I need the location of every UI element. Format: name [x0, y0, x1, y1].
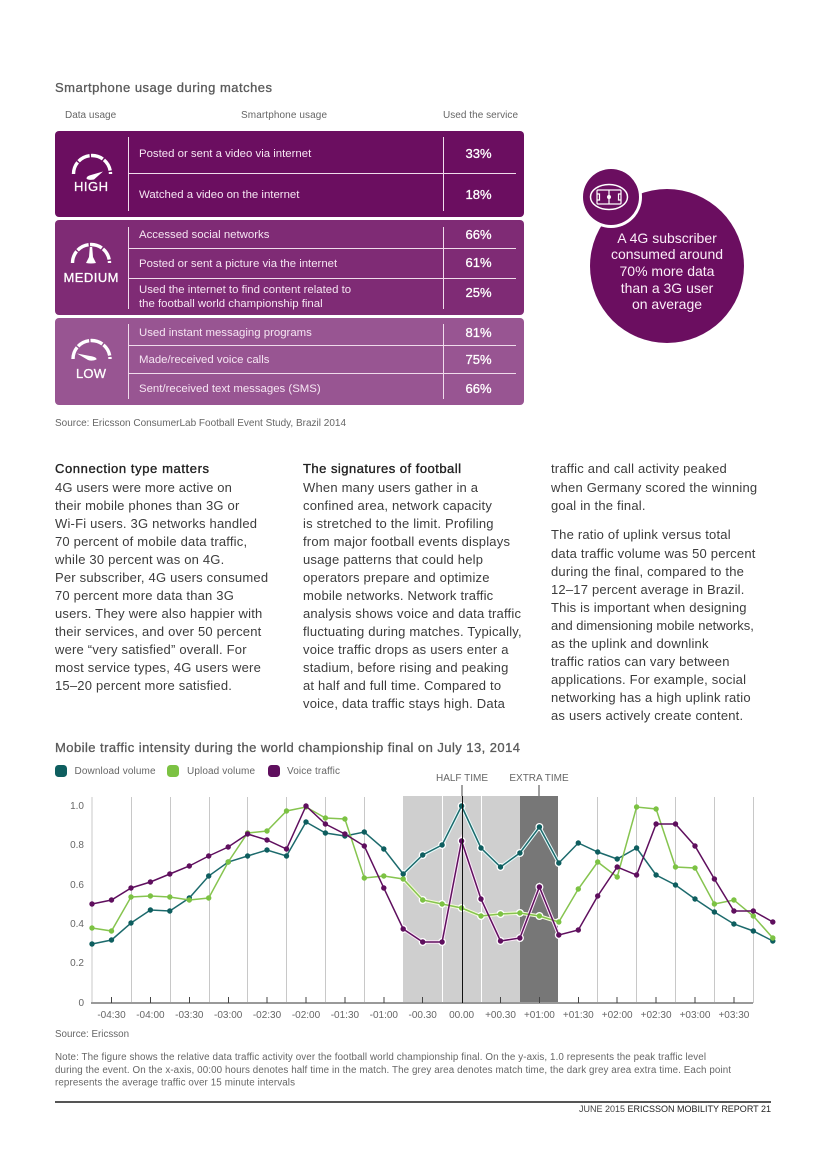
panel: low data usage: Used instant messaging programs	[139, 327, 312, 339]
annotations: half time and extra time: EXTRA TIME	[509, 773, 569, 784]
text column: continuation: data traffic volume was 50 percent	[551, 546, 756, 561]
chart note: represents the average traffic over 15 minute intervals	[55, 1078, 295, 1088]
table column headers: Used the service	[443, 110, 518, 121]
x-axis labels	[97, 1010, 750, 1021]
y-axis labels: 0.6	[70, 880, 84, 891]
halos inside match time	[403, 802, 559, 946]
callout: 4G subscriber: than a 3G user	[621, 280, 714, 296]
table column headers	[65, 110, 518, 121]
panel: medium data usage: 25%	[465, 285, 492, 300]
panel: medium data usage: 61%	[465, 255, 492, 270]
line chart: traffic intensity	[70, 773, 773, 1021]
callout: 4G subscriber: on average	[632, 296, 702, 312]
x-axis labels: +03:00	[680, 1010, 711, 1021]
text column: the signatures of football: The signatures of football	[303, 461, 461, 476]
text column: connection type matters: Wi-Fi users. 3G networks handled	[55, 516, 257, 531]
text column: the signatures of football: operators prepare and optimize	[303, 570, 490, 585]
text column: connection type matters: their services, and over 50 percent	[55, 624, 262, 639]
panel: medium data usage: Posted or sent a picture via the internet	[139, 258, 338, 270]
text column: continuation: when Germany scored the winning	[550, 480, 757, 495]
text column: connection type matters: 15–20 percent more satisfied.	[55, 678, 232, 693]
text column: connection type matters: while 30 percent was on 4G.	[54, 552, 224, 567]
x-axis labels: -02:00	[292, 1010, 321, 1021]
annotations: half time and extra time	[436, 773, 569, 784]
text column: continuation: networking has a high uplink ratio	[551, 690, 751, 705]
text column: the signatures of football: voice traffic drops as users enter a	[303, 642, 509, 657]
text column: connection type matters: Per subscriber, 4G users consumed	[55, 570, 268, 585]
table column headers: Smartphone usage	[241, 110, 327, 121]
icon: gauge high	[74, 156, 110, 180]
text column: continuation: as the uplink and downlink	[551, 636, 709, 651]
text column: continuation: applications. For example, social	[551, 672, 746, 687]
text column: the signatures of football: stadium, before rising and peaking	[303, 660, 509, 675]
series: upload volume	[92, 807, 773, 938]
annotations: half time and extra time: HALF TIME	[436, 773, 488, 784]
x-axis labels: -04:30	[97, 1010, 126, 1021]
text column: continuation: and dimensioning mobile networks,	[551, 618, 754, 633]
panel: high data usage	[55, 131, 524, 217]
icon: gauge medium	[72, 244, 110, 264]
callout: 4G subscriber	[580, 166, 744, 343]
panel: low data usage: Sent/received text messages (SMS)	[139, 383, 321, 395]
series: download volume	[92, 806, 773, 944]
text column: the signatures of football: mobile networks. Network traffic	[303, 588, 494, 603]
panel: low data usage: 81%	[465, 325, 492, 340]
text column: continuation: goal in the final.	[551, 498, 646, 513]
text column: continuation: traffic ratios can vary between	[551, 654, 730, 669]
chart legend: Voice traffic	[287, 766, 340, 777]
y-axis labels: 0.2	[70, 958, 84, 969]
panel: medium data usage: MEDIUM	[64, 270, 118, 285]
text column: connection type matters: most service types, 4G users were	[55, 660, 261, 675]
text column: the signatures of football: at half and full time. Compared to	[303, 678, 501, 693]
x-axis labels: 00.00	[449, 1010, 475, 1021]
heading: smartphone usage: Smartphone usage during matches	[55, 80, 272, 95]
x-axis labels: -03:30	[175, 1010, 204, 1021]
text column: connection type matters: 70 percent of mobile data traffic,	[55, 534, 247, 549]
chart note: during the event. On the x-axis, 00:00 hours denotes half time in the match. The grey area denotes match time, the dark grey area extra time. Each point	[55, 1065, 731, 1076]
text column: the signatures of football: voice, data traffic stays high. Data	[303, 696, 506, 711]
x-axis labels: +02:00	[602, 1010, 633, 1021]
y-axis labels	[70, 801, 84, 1009]
text column: the signatures of football: from major football events displays	[303, 534, 510, 549]
callout: 4G subscriber: 70% more data	[620, 263, 715, 279]
panel: low data usage: Made/received voice calls	[139, 354, 270, 366]
text column: the signatures of football: fluctuating during matches. Typically,	[303, 624, 522, 639]
footer: JUNE 2015 ERICSSON MOBILITY REPORT 21	[579, 1104, 771, 1114]
panel: medium data usage: Used the internet to find content related to	[139, 284, 351, 296]
panel: medium data usage: the football world championship final	[139, 298, 323, 310]
y-axis labels: 0	[78, 998, 84, 1009]
callout: 4G subscriber: A 4G subscriber	[617, 230, 717, 246]
icon: gauge low	[73, 340, 110, 361]
panel: low data usage: 75%	[465, 352, 492, 367]
x-axis labels: +00.30	[485, 1010, 516, 1021]
panel: high data usage: Watched a video on the internet	[139, 189, 300, 201]
panel: high data usage: HIGH	[74, 179, 108, 194]
text column: continuation: traffic and call activity peaked	[551, 461, 727, 476]
x-axis labels: -01:00	[370, 1010, 398, 1021]
chart legend: Download volume	[74, 766, 156, 777]
panel: high data usage: 18%	[465, 187, 492, 202]
series: voice traffic	[92, 806, 773, 942]
text column: connection type matters: 4G users were more active on	[55, 480, 232, 495]
panel: medium data usage: 66%	[465, 227, 492, 242]
x-axis labels: -04:00	[136, 1010, 165, 1021]
table source: Source: Ericsson ConsumerLab Football Event Study, Brazil 2014	[55, 418, 346, 429]
x-axis labels: -01:30	[331, 1010, 360, 1021]
text column: the signatures of football: is stretched to the limit. Profiling	[303, 516, 494, 531]
text column: the signatures of football: When many users gather in a	[303, 480, 479, 495]
text column: continuation	[550, 461, 757, 723]
x-axis labels: +01:00	[524, 1010, 555, 1021]
chart legend: Upload volume	[187, 766, 255, 777]
panel: low data usage: LOW	[76, 366, 107, 381]
panel: low data usage: 66%	[465, 381, 492, 396]
text column: connection type matters: their mobile phones than 3G or	[55, 498, 240, 513]
text column: the signatures of football: analysis shows voice and data traffic	[303, 606, 521, 621]
table column headers: Data usage	[65, 110, 117, 121]
panel: high data usage: 33%	[465, 146, 492, 161]
text column: the signatures of football	[303, 461, 522, 711]
x-axis labels: +03:30	[718, 1010, 750, 1021]
heading: mobile traffic intensity: Mobile traffic intensity during the world championship final on July 13, 2014	[55, 740, 520, 755]
text column: continuation: as users actively create content.	[551, 708, 743, 723]
chart note	[55, 1052, 731, 1088]
y-axis labels: 1.0	[70, 801, 84, 812]
text column: connection type matters: users. They were also happier with	[55, 606, 262, 621]
icon: football pitch	[580, 166, 642, 228]
x-axis labels: -00.30	[409, 1010, 437, 1021]
callout: 4G subscriber: consumed around	[611, 246, 723, 262]
text column: continuation: during the final, compared to the	[551, 564, 744, 579]
panel: low data usage	[55, 318, 524, 405]
text column: the signatures of football: confined area, network capacity	[303, 498, 492, 513]
text column: continuation: 12–17 percent average in Brazil.	[551, 582, 745, 597]
text column: connection type matters: Connection type matters	[55, 461, 210, 476]
chart source: Source: Ericsson	[55, 1029, 129, 1040]
panel: medium data usage: Accessed social networks	[139, 229, 270, 241]
text column: connection type matters	[54, 461, 268, 693]
chart legend	[55, 765, 340, 777]
text column: connection type matters: 70 percent more data than 3G	[55, 588, 234, 603]
panel: medium data usage	[55, 220, 524, 315]
footer rule	[55, 1101, 771, 1103]
text column: continuation: The ratio of uplink versus total	[551, 527, 731, 542]
panel: high data usage: Posted or sent a video via internet	[139, 148, 312, 160]
x-axis labels: +02:30	[641, 1010, 672, 1021]
x-axis labels: -03:00	[214, 1010, 243, 1021]
chart note: Note: The figure shows the relative data traffic activity over the football world championship final. On the y-axis, 1.0 represents the peak traffic level	[55, 1052, 706, 1063]
y-axis labels: 0.8	[70, 840, 84, 851]
text column: the signatures of football: usage patterns that could help	[303, 552, 483, 567]
y-axis labels: 0.4	[70, 919, 84, 930]
x-axis labels: +01:30	[563, 1010, 594, 1021]
x-axis labels: -02:30	[253, 1010, 282, 1021]
text column: continuation: This is important when designing	[551, 600, 747, 615]
text column: connection type matters: were “very satisfied” overall. For	[54, 642, 247, 657]
